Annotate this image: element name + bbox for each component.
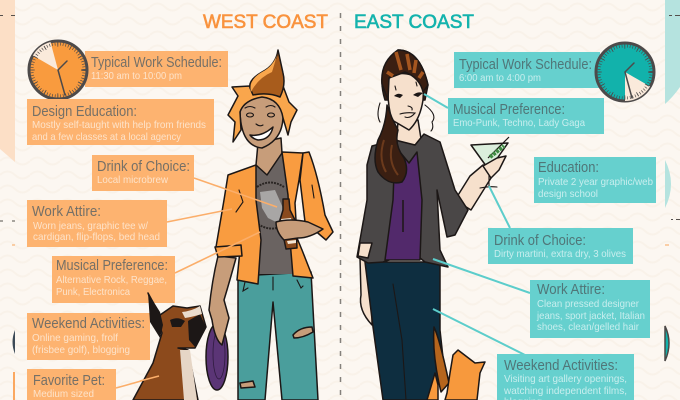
dark jeans [365, 262, 444, 400]
east box: typical work schedule: 6:00 am to 4:00 pm [459, 72, 541, 84]
west box: typical work schedule [85, 51, 228, 87]
arms and hands [209, 220, 323, 345]
east box: drink of choice: Dirty martini, extra dry, 3 olives [494, 248, 626, 260]
west box: musical preference [52, 256, 175, 303]
west box: drink of choice: Drink of Choice: [97, 159, 190, 175]
leader lines: east [424, 94, 530, 355]
frisbee [206, 324, 228, 390]
west box: work attire [27, 200, 167, 247]
west box: typical work schedule: Typical Work Schedule: [91, 55, 222, 71]
east box: work attire [530, 280, 650, 338]
jeans [238, 272, 318, 400]
west box: drink of choice: Local microbrew [97, 174, 168, 186]
west clock [29, 41, 87, 99]
orange cat [427, 327, 485, 400]
west box: design education: and a few classes at a local agency [32, 131, 182, 143]
west box: work attire: Worn jeans, graphic tee w/ [33, 220, 148, 232]
illustration: east coast designer [357, 50, 509, 400]
martini glass [471, 137, 509, 188]
west box: weekend activities: (frisbee golf), blogging [32, 344, 130, 356]
purple top [385, 146, 422, 260]
west box: weekend activities [27, 313, 150, 360]
east box: drink of choice [488, 228, 633, 264]
east box: work attire: jeans, sport jacket, Italian [536, 310, 645, 322]
west box: design education: Design Education: [32, 104, 137, 120]
west box: design education: Mostly self-taught with help from friends [32, 119, 206, 131]
hand in pocket [358, 243, 372, 258]
jeans seam [393, 284, 406, 400]
cardigan [216, 152, 333, 284]
east box: education: Private 2 year graphic/web [538, 176, 653, 188]
west box: weekend activities: Online gaming, frolf [32, 332, 118, 344]
west box: musical preference: Punk, Electronica [56, 286, 130, 298]
heading: East Coast: EAST COAST [354, 12, 474, 33]
east box: musical preference: Emo-Punk, Techno, Lady Gaga [453, 117, 585, 129]
spiky hair [228, 50, 297, 142]
east box: work attire: shoes, clean/gelled hair [537, 321, 639, 333]
heading: West Coast: WEST COAST [203, 12, 328, 33]
east box: musical preference: Musical Preference: [453, 102, 565, 118]
west box: work attire: Work Attire: [32, 204, 101, 220]
centre dashed divider [340, 13, 342, 400]
west box: weekend activities: Weekend Activities: [32, 316, 145, 332]
west box: musical preference: Alternative Rock, Reggae, [56, 274, 167, 286]
east box: weekend activities: watching independent films, [503, 385, 627, 397]
west box: favorite pet [27, 369, 116, 400]
west box: musical preference: Musical Preference: [56, 258, 168, 274]
right edge panel [665, 0, 680, 361]
east box: weekend activities: Weekend Activities: [504, 358, 618, 374]
west box: typical work schedule: 11:30 am to 10:00 pm [91, 70, 182, 82]
east box: education: design school [538, 188, 598, 200]
east box: education: Education: [538, 160, 599, 176]
neck [256, 138, 282, 175]
east box: weekend activities [497, 354, 634, 400]
leader lines: west [116, 178, 277, 388]
beer bottle [280, 199, 297, 249]
east box: weekend activities: Visiting art gallery openings, [504, 373, 627, 385]
east box: typical work schedule: Typical Work Schedule: [459, 57, 592, 73]
west box: design education [27, 99, 214, 145]
bare leg [360, 258, 372, 325]
west box: favorite pet: Favorite Pet: [33, 373, 105, 389]
east box: work attire: Clean pressed designer [537, 298, 639, 310]
west box: favorite pet: Medium sized [33, 388, 94, 400]
east box: musical preference [448, 98, 604, 134]
east box: drink of choice: Drink of Choice: [494, 233, 586, 249]
east box: education [534, 157, 656, 203]
hair [375, 50, 434, 183]
east clock [596, 43, 654, 101]
graphic tee [255, 152, 293, 274]
east box: typical work schedule [454, 52, 600, 88]
face [388, 73, 424, 130]
head and face [240, 93, 283, 148]
east box: work attire: Work Attire: [537, 282, 605, 298]
leader line: pet tip on dog [140, 376, 159, 381]
west box: drink of choice [92, 155, 194, 191]
illustration: west coast designer [206, 50, 333, 400]
neck [396, 120, 422, 162]
west box: work attire: cardigan, flip-flops, bed head [33, 231, 160, 243]
sport jacket [357, 134, 468, 267]
boxer dog [133, 293, 206, 400]
hair back [382, 50, 428, 100]
raised arm [455, 165, 495, 210]
left edge panel [0, 0, 15, 400]
